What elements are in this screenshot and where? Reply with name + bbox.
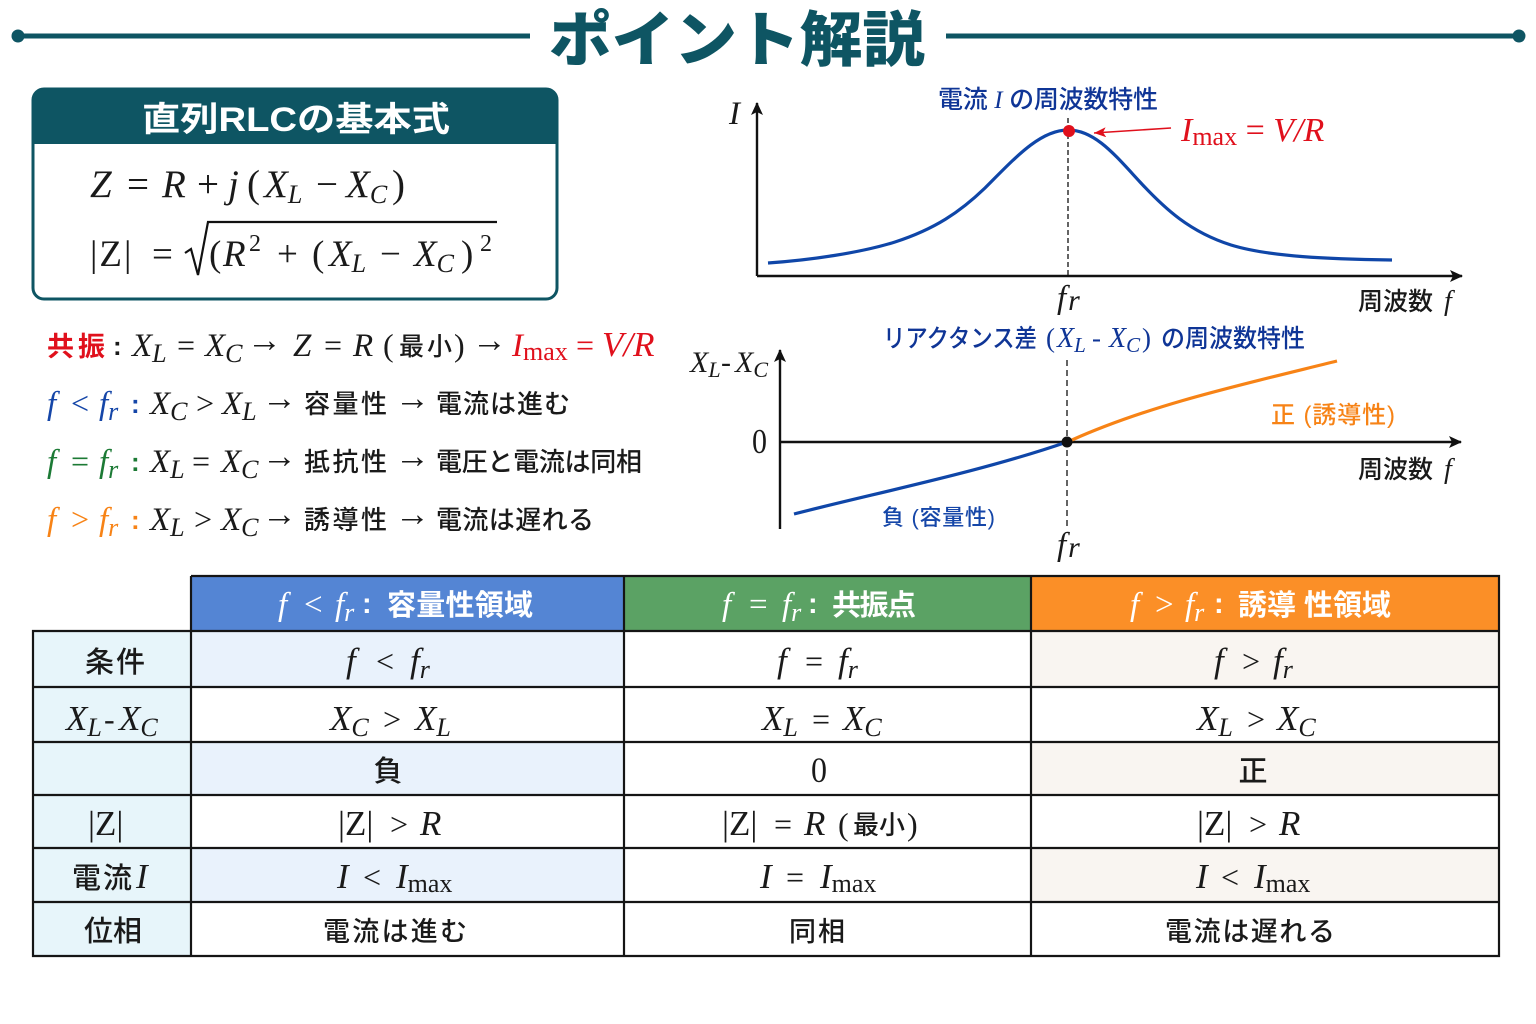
formula: impedance: ) bbox=[392, 163, 405, 206]
row: reactance difference: L bbox=[1217, 713, 1233, 742]
row: impedance: |Z| bbox=[88, 804, 123, 843]
line: resonance: X bbox=[205, 328, 225, 364]
table grid bbox=[33, 576, 1499, 956]
line: resistive: : bbox=[131, 447, 140, 477]
comparison table bbox=[33, 576, 1499, 956]
row: impedance: |Z| bbox=[338, 804, 373, 843]
line: resonance: R bbox=[352, 328, 373, 364]
label: capacitive: 負 (容量性) bbox=[882, 505, 995, 530]
line: resonance: → bbox=[472, 320, 507, 360]
row: sign: 0 bbox=[811, 750, 827, 790]
line: capacitive: f bbox=[47, 386, 60, 422]
title: ポイント解説 bbox=[549, 7, 925, 74]
formula: impedance magnitude: X bbox=[414, 234, 437, 275]
row: phase: 電流は遅れる bbox=[1165, 917, 1335, 947]
row: current bbox=[72, 857, 1310, 898]
table header: capacitive: 容量性領域 bbox=[387, 589, 533, 622]
row: condition: f bbox=[346, 641, 360, 680]
line: resonance: 最小 bbox=[399, 333, 452, 361]
row: impedance: ) bbox=[907, 806, 918, 842]
table body fills bbox=[33, 631, 1499, 956]
table header: inductive: 誘導 性領域 bbox=[1238, 589, 1391, 622]
row: reactance difference: X bbox=[415, 699, 436, 738]
resonance curve bbox=[768, 130, 1392, 263]
chart title: C bbox=[1126, 333, 1141, 357]
line: inductive: X bbox=[221, 502, 241, 538]
line: capacitive: L bbox=[241, 397, 257, 426]
panel heading: 直列RLCの基本式 bbox=[142, 101, 450, 139]
line: resistive bbox=[47, 436, 642, 484]
title banner bbox=[12, 7, 1526, 74]
formula: impedance magnitude bbox=[90, 222, 497, 278]
line: resonance: 共振 bbox=[47, 332, 105, 362]
row: condition: f bbox=[1214, 641, 1228, 680]
row: impedance: = bbox=[774, 806, 792, 842]
row: reactance difference: > bbox=[1247, 701, 1265, 737]
line: resistive: → bbox=[262, 436, 297, 476]
line: resonance: V/R bbox=[602, 325, 654, 364]
row: impedance: ( bbox=[838, 806, 849, 842]
row: current: max bbox=[832, 869, 876, 898]
line: resonance: = bbox=[324, 327, 342, 363]
line: resistive: f bbox=[47, 444, 60, 480]
row: condition: r bbox=[420, 655, 431, 684]
chart title: 電流 I の周波数特性 bbox=[938, 86, 1158, 114]
line: resonance: X bbox=[132, 328, 152, 364]
line: capacitive: C bbox=[170, 397, 188, 426]
line: capacitive: f bbox=[99, 386, 108, 422]
line: resonance: I bbox=[512, 328, 523, 364]
row: condition: 条件 bbox=[85, 646, 145, 679]
formula: impedance: j bbox=[223, 163, 239, 206]
table header: resonance: f bbox=[782, 587, 791, 623]
line: resistive: r bbox=[108, 455, 119, 484]
table header: inductive: r bbox=[1194, 598, 1205, 627]
axes bbox=[757, 103, 1462, 276]
row: reactance difference: X bbox=[66, 699, 87, 738]
row: current: max bbox=[1266, 869, 1310, 898]
formula: impedance: = bbox=[127, 163, 149, 206]
row: current: I bbox=[1254, 857, 1266, 896]
callout: Imax: max bbox=[1192, 122, 1237, 151]
row: reactance difference: L bbox=[435, 713, 451, 742]
row: current: I bbox=[336, 857, 351, 896]
row: condition: r bbox=[1283, 655, 1294, 684]
x axis label: f bbox=[1444, 286, 1455, 317]
line: inductive: X bbox=[150, 502, 170, 538]
line: resonance: L bbox=[151, 339, 167, 368]
line: resonance: ) bbox=[454, 327, 465, 363]
row: impedance: 最小 bbox=[853, 810, 905, 840]
line: capacitive: X bbox=[222, 386, 242, 422]
row: impedance: |Z| bbox=[722, 804, 757, 843]
chart: current vs frequency bbox=[728, 86, 1462, 317]
table header: capacitive: < bbox=[304, 587, 323, 623]
row: condition: f bbox=[1273, 641, 1283, 680]
table header: inductive: f bbox=[1185, 587, 1194, 623]
table header: capacitive: : bbox=[362, 588, 372, 620]
row: reactance difference: L bbox=[86, 713, 102, 742]
row: phase: 位相 bbox=[84, 915, 142, 948]
table header: inductive: > bbox=[1155, 587, 1174, 623]
resonant frequency label: f bbox=[1057, 280, 1066, 316]
inductive curve bbox=[1072, 361, 1337, 440]
row: reactance difference: C bbox=[1298, 713, 1316, 742]
row: impedance: |Z| bbox=[1197, 804, 1232, 843]
y axis label: I bbox=[728, 96, 742, 132]
line: resonance: = bbox=[576, 327, 594, 363]
row: impedance: > bbox=[390, 806, 408, 842]
row: current: max bbox=[408, 869, 452, 898]
y axis label bbox=[689, 346, 768, 382]
line: resistive: L bbox=[169, 455, 185, 484]
line: resonance bbox=[47, 320, 654, 368]
row: reactance difference: X bbox=[843, 699, 864, 738]
line: resistive: = bbox=[192, 443, 210, 479]
line: capacitive: r bbox=[108, 397, 119, 426]
capacitive curve bbox=[794, 442, 1067, 514]
formula: impedance bbox=[90, 163, 405, 209]
arrow: peak callout bbox=[1094, 128, 1171, 133]
formula: impedance magnitude: R bbox=[222, 234, 246, 275]
line: resonance: Z bbox=[293, 328, 312, 364]
chart title: L bbox=[1073, 333, 1086, 357]
chart title: ( bbox=[1046, 323, 1055, 353]
row: condition: > bbox=[1242, 643, 1260, 679]
row: impedance: R bbox=[1278, 804, 1300, 843]
callout: Imax: I bbox=[1181, 112, 1192, 149]
row: condition: f bbox=[838, 641, 848, 680]
line: resonance: max bbox=[523, 337, 568, 366]
row: current: I bbox=[820, 857, 832, 896]
y axis label: X bbox=[735, 346, 753, 379]
line: inductive bbox=[47, 494, 594, 542]
row: condition: f bbox=[777, 641, 791, 680]
line: capacitive: X bbox=[150, 386, 170, 422]
line: resistive: 電圧と電流は同相 bbox=[436, 447, 642, 477]
x axis label: 周波数 bbox=[1358, 288, 1433, 316]
row: reactance difference: C bbox=[140, 713, 158, 742]
line: inductive: > bbox=[194, 501, 212, 537]
table header: resonance: 共振点 bbox=[832, 589, 916, 622]
row: sign: 正 bbox=[1238, 756, 1268, 788]
line: resonance: → bbox=[247, 320, 282, 360]
line: capacitive: : bbox=[131, 389, 140, 419]
table header: capacitive: r bbox=[344, 598, 355, 627]
line: inductive: r bbox=[108, 513, 119, 542]
row: impedance: R bbox=[419, 804, 441, 843]
x axis label: 周波数 bbox=[1358, 456, 1433, 484]
formula: impedance magnitude: = bbox=[152, 234, 173, 275]
row: condition: f bbox=[410, 641, 420, 680]
table header: inductive: f bbox=[1130, 587, 1143, 623]
formula: impedance: C bbox=[370, 180, 388, 209]
formula: impedance magnitude: + bbox=[277, 234, 298, 275]
row: reactance difference: X bbox=[762, 699, 783, 738]
line: resonance: = bbox=[177, 327, 195, 363]
row: condition: < bbox=[376, 643, 394, 679]
formula: impedance: + bbox=[197, 163, 219, 206]
line: inductive: L bbox=[169, 513, 185, 542]
row: reactance difference: L bbox=[782, 713, 798, 742]
row: sign: 負 bbox=[373, 755, 403, 788]
row: sign bbox=[373, 750, 1268, 790]
row: current: I bbox=[396, 857, 408, 896]
line: capacitive: 容量性 bbox=[304, 389, 387, 419]
line: inductive: 電流は遅れる bbox=[436, 505, 594, 535]
resonant frequency label: f bbox=[1057, 527, 1066, 563]
chart title: リアクタンス差 bbox=[883, 325, 1037, 353]
formula: impedance: R bbox=[161, 163, 186, 206]
line: resistive: = bbox=[71, 443, 89, 479]
line: capacitive: → bbox=[262, 378, 297, 418]
formula: impedance magnitude: L bbox=[351, 249, 366, 278]
row: phase: 同相 bbox=[789, 917, 845, 947]
line: resistive: C bbox=[241, 455, 259, 484]
row: current: = bbox=[786, 859, 804, 895]
table header: resonance: = bbox=[749, 587, 768, 623]
row: condition bbox=[85, 641, 1294, 684]
line: capacitive: → bbox=[395, 378, 430, 418]
table header: capacitive: f bbox=[278, 587, 291, 623]
axes bbox=[780, 350, 1461, 530]
peak marker bbox=[1063, 125, 1075, 137]
formula: impedance: X bbox=[346, 163, 370, 206]
line: capacitive: < bbox=[71, 385, 89, 421]
table header: capacitive: f bbox=[335, 587, 344, 623]
formula: impedance: ( bbox=[247, 163, 260, 206]
formula: impedance magnitude: − bbox=[380, 234, 401, 275]
line: inductive: : bbox=[131, 505, 140, 535]
panel: series RLC formulas bbox=[32, 88, 558, 299]
table header: resonance: f bbox=[722, 587, 735, 623]
row: reactance difference: C bbox=[864, 713, 882, 742]
chart title: - bbox=[1092, 323, 1101, 353]
line: inductive: f bbox=[99, 502, 108, 538]
table header: capacitive bbox=[191, 576, 624, 631]
line: resonance: ( bbox=[383, 327, 394, 363]
resonant frequency label: r bbox=[1068, 284, 1080, 317]
table header: resonance: : bbox=[808, 588, 818, 620]
line: resistive: X bbox=[150, 444, 170, 480]
table header: inductive: : bbox=[1214, 588, 1224, 620]
chart: reactance difference vs frequency bbox=[689, 323, 1461, 564]
row: reactance difference bbox=[64, 699, 1316, 742]
chart title bbox=[883, 323, 1305, 357]
row: reactance difference: X bbox=[330, 699, 351, 738]
resonant frequency label: r bbox=[1068, 531, 1080, 564]
row: reactance difference: = bbox=[812, 701, 830, 737]
row: reactance difference: C bbox=[351, 713, 369, 742]
row: reactance difference: X bbox=[119, 699, 140, 738]
line: inductive: f bbox=[47, 502, 60, 538]
line: resistive: f bbox=[99, 444, 108, 480]
row: impedance: R bbox=[803, 804, 825, 843]
text block: resonance conditions bbox=[47, 320, 654, 542]
formula: impedance magnitude: ( bbox=[312, 234, 324, 275]
formula: impedance: Z bbox=[90, 163, 113, 206]
y axis label: C bbox=[753, 357, 768, 382]
line: capacitive: 電流は進む bbox=[436, 389, 570, 419]
row: reactance difference: > bbox=[383, 701, 401, 737]
table header: resonance: r bbox=[791, 598, 802, 627]
row: phase: 電流は進む bbox=[323, 917, 467, 947]
row: current: I bbox=[759, 857, 774, 896]
chart title: X bbox=[1057, 323, 1074, 354]
row: impedance: > bbox=[1249, 806, 1267, 842]
chart title: ) bbox=[1142, 323, 1151, 353]
line: resistive: X bbox=[221, 444, 241, 480]
callout: Imax: V/R bbox=[1273, 112, 1324, 149]
line: capacitive: > bbox=[196, 385, 214, 421]
row: condition: = bbox=[805, 643, 823, 679]
line: inductive: → bbox=[262, 494, 297, 534]
line: resonance: : bbox=[113, 331, 122, 361]
row: current: I bbox=[135, 857, 150, 896]
row: current: < bbox=[363, 859, 381, 895]
row: condition: r bbox=[848, 655, 859, 684]
callout: Imax: = bbox=[1237, 112, 1273, 149]
zero crossing point bbox=[1062, 436, 1072, 448]
formula: impedance magnitude: C bbox=[437, 249, 455, 278]
x axis label: f bbox=[1444, 454, 1455, 485]
formula: impedance magnitude: ( bbox=[209, 234, 221, 275]
formula: impedance: X bbox=[264, 163, 288, 206]
formula: impedance magnitude: ) bbox=[461, 234, 473, 275]
line: capacitive bbox=[47, 378, 570, 426]
line: resistive: 抵抗性 bbox=[304, 447, 387, 477]
row: current: 電流 bbox=[72, 862, 132, 895]
chart title: X bbox=[1109, 323, 1126, 354]
line: resistive: → bbox=[395, 436, 430, 476]
line: inductive: > bbox=[71, 501, 89, 537]
row: impedance bbox=[88, 804, 1300, 843]
line: inductive: 誘導性 bbox=[304, 505, 387, 535]
formula: impedance magnitude: 2 bbox=[480, 231, 492, 257]
row: current: < bbox=[1221, 859, 1239, 895]
formula: impedance magnitude: 2 bbox=[249, 231, 261, 257]
line: inductive: C bbox=[241, 513, 259, 542]
table header: inductive bbox=[1031, 576, 1499, 631]
line: inductive: → bbox=[395, 494, 430, 534]
y axis label: L bbox=[707, 357, 721, 382]
line: resonance: C bbox=[225, 339, 243, 368]
formula: impedance: − bbox=[316, 163, 338, 206]
row: reactance difference: - bbox=[104, 701, 115, 737]
formula: impedance magnitude: |Z| bbox=[90, 234, 133, 275]
formula: impedance magnitude: X bbox=[329, 234, 352, 275]
row: reactance difference: X bbox=[1197, 699, 1218, 738]
row: current: I bbox=[1195, 857, 1210, 896]
chart title: の周波数特性 bbox=[1161, 325, 1305, 353]
row: reactance difference: X bbox=[1277, 699, 1298, 738]
formula: impedance: L bbox=[287, 180, 302, 209]
label: inductive: 正 (誘導性) bbox=[1271, 402, 1395, 429]
y axis label: X bbox=[690, 346, 708, 379]
y axis label: - bbox=[721, 346, 731, 379]
table header: resonance bbox=[624, 576, 1031, 631]
zero label: 0 bbox=[752, 422, 767, 461]
row: phase bbox=[84, 915, 1335, 948]
